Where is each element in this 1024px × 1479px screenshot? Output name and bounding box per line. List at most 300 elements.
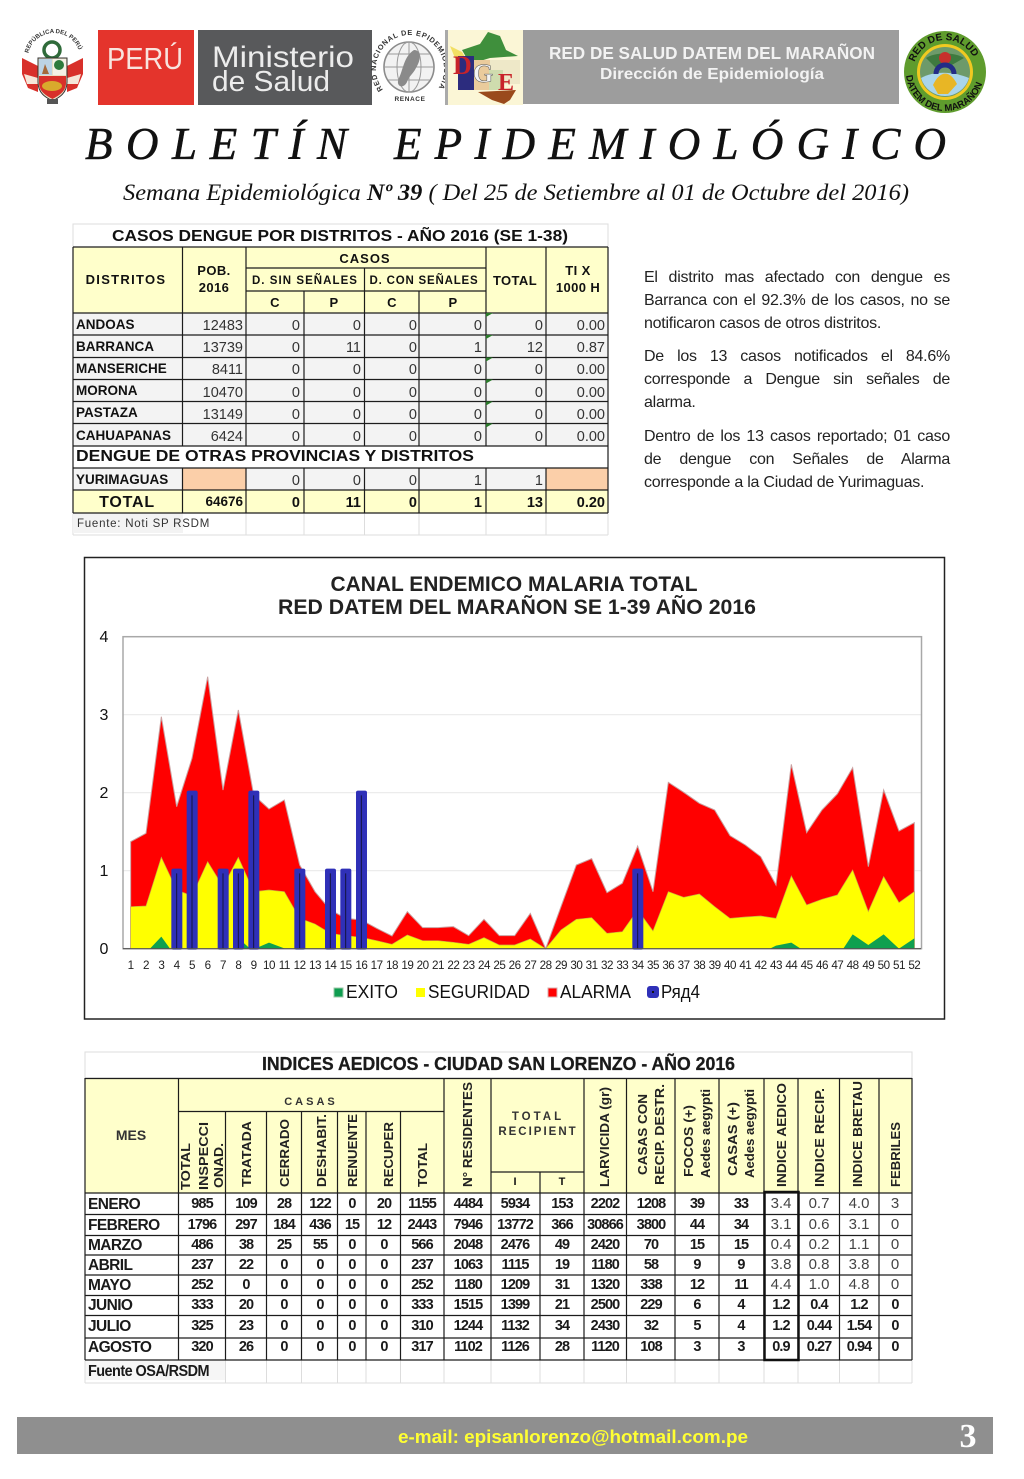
- table source note: Fuente OSA/RSDM: [88, 1363, 209, 1380]
- x axis week labels: 50: [878, 959, 891, 972]
- x axis week labels: 51: [893, 959, 905, 972]
- row: Yurimaguas: YURIMAGUAS: [76, 472, 168, 487]
- row: Andoas: 0: [353, 318, 361, 334]
- x axis week labels: 11: [279, 959, 290, 972]
- row: Andoas: 12483: [203, 318, 243, 334]
- row: Julio: 310: [411, 1318, 434, 1334]
- row: Mayo: 4.8: [849, 1276, 869, 1293]
- row: Julio: 1244: [454, 1318, 483, 1334]
- row: Febrero: 3.1: [849, 1216, 869, 1233]
- x axis week labels: 15: [340, 959, 352, 972]
- table column headers: P: [448, 295, 458, 310]
- row: Marzo: 2048: [454, 1237, 483, 1253]
- row: Junio: 229: [640, 1297, 663, 1313]
- row: Junio: 2500: [591, 1297, 620, 1313]
- row: Julio: 32: [644, 1318, 659, 1334]
- row: Marzo: 566: [411, 1237, 434, 1253]
- x axis week labels: 23: [463, 959, 475, 972]
- row: Abril: 1063: [454, 1257, 483, 1273]
- row: Morona: 0.00: [577, 385, 605, 401]
- row: Enero: 3.4: [771, 1195, 791, 1212]
- row: Julio: 1.54: [847, 1318, 872, 1334]
- panel: dengue cases table: [73, 224, 608, 535]
- icon: coat of arms of Peru: REPÚBLICA DEL PERÚ: [24, 28, 84, 53]
- x axis week labels: 40: [724, 959, 737, 972]
- row: Abril: 0: [280, 1257, 288, 1273]
- logo: RENACE globe: RENACE: [394, 96, 426, 103]
- x axis week labels: 48: [847, 959, 859, 972]
- row: Julio: [88, 1318, 899, 1335]
- table column headers: MES: [116, 1127, 146, 1143]
- table column headers: TOTAL: [178, 1143, 193, 1190]
- x axis week labels: 3: [158, 959, 164, 972]
- row: Febrero: 12: [377, 1217, 392, 1233]
- row: Marzo: 25: [277, 1237, 292, 1253]
- row: Abril: 9: [737, 1257, 745, 1273]
- area: SEGURIDAD: [131, 857, 914, 949]
- row: Julio: 0: [891, 1318, 899, 1334]
- footer bar: [17, 1417, 993, 1455]
- x axis week labels: 36: [662, 959, 674, 972]
- table column headers: RECIP. DESTR.: [652, 1084, 667, 1185]
- x axis week labels: 1: [128, 959, 134, 972]
- chart legend: EXITO: [346, 982, 398, 1002]
- row: Andoas: 0.00: [577, 318, 605, 334]
- x axis week labels: 14: [324, 959, 337, 972]
- row: Pastaza: 0: [353, 407, 361, 423]
- row: Barranca: 0.87: [577, 340, 605, 356]
- row: Febrero: 297: [235, 1217, 258, 1233]
- logo: Ministerio de Salud: [198, 30, 372, 105]
- table column headers: DISTRITOS: [86, 272, 166, 287]
- x axis week labels: 25: [493, 959, 505, 972]
- row: Pastaza: 0: [292, 407, 300, 423]
- row: Cahuapanas: CAHUAPANAS: [76, 428, 171, 443]
- x axis week labels: 9: [251, 959, 257, 972]
- x axis week labels: 19: [401, 959, 413, 972]
- row: Agosto: 3: [737, 1339, 745, 1355]
- x axis week labels: 13: [309, 959, 321, 972]
- table column headers: D. SIN SEÑALES: [252, 274, 358, 287]
- row: Total: 64676: [205, 494, 243, 509]
- row: Abril: 19: [555, 1257, 570, 1273]
- row: Andoas: [76, 317, 605, 334]
- row: Junio: 0: [316, 1297, 324, 1313]
- x axis week labels: 43: [770, 959, 782, 972]
- x axis week labels: 17: [371, 959, 383, 972]
- x axis week labels: 26: [509, 959, 521, 972]
- row: Febrero: 13772: [497, 1217, 534, 1233]
- text block: dengue analysis paragraph 1: notificaron casos de otros distritos.: [644, 315, 881, 332]
- row: Junio: 0.4: [810, 1297, 829, 1313]
- row: Enero: ENERO: [88, 1196, 141, 1213]
- row: Mayo: 0: [280, 1277, 288, 1293]
- row: Junio: 0: [280, 1297, 288, 1313]
- x axis week labels: 28: [540, 959, 552, 972]
- area: EXITO: [150, 934, 914, 949]
- table column headers: ONAD.: [211, 1143, 226, 1188]
- row: Barranca: 0: [409, 340, 417, 356]
- row: Enero: 0: [348, 1196, 356, 1212]
- row: Manseriche: 0: [535, 362, 543, 378]
- x axis week labels: [128, 959, 920, 972]
- table column headers: [116, 1081, 903, 1190]
- x axis week labels: 42: [755, 959, 767, 972]
- row: Andoas: 0: [409, 318, 417, 334]
- x axis week labels: 20: [417, 959, 430, 972]
- chart legend: [334, 982, 700, 1002]
- row: Agosto: 317: [411, 1339, 434, 1355]
- y axis labels: 4: [100, 629, 109, 646]
- row: Cahuapanas: 0: [535, 429, 543, 445]
- text block: dengue analysis paragraph 3: Dentro de los 13 casos reportado; 01 caso: [644, 428, 950, 445]
- row: Cahuapanas: 0.00: [577, 429, 605, 445]
- row: Morona: 0: [409, 385, 417, 401]
- row: Mayo: MAYO: [88, 1277, 131, 1294]
- x axis week labels: 35: [647, 959, 659, 972]
- x axis week labels: 12: [294, 959, 306, 972]
- row: Enero: 0.7: [809, 1195, 829, 1212]
- x axis week labels: 47: [831, 959, 843, 972]
- row: Mayo: 252: [191, 1277, 214, 1293]
- row: Marzo: 1.1: [849, 1236, 869, 1253]
- row: Cahuapanas: 0: [409, 429, 417, 445]
- table column headers: TOTAL: [493, 273, 537, 288]
- row: Yurimaguas: 1: [474, 473, 482, 489]
- row: Total: 0: [409, 495, 417, 511]
- row: Junio: 1.2: [850, 1297, 869, 1313]
- row: Junio: 1515: [454, 1297, 483, 1313]
- row: Mayo: 12: [690, 1277, 705, 1293]
- table fills and grid: [73, 224, 608, 535]
- row: Agosto: 0: [380, 1339, 388, 1355]
- row: Enero: 122: [309, 1196, 332, 1212]
- logo: DGE map: E: [498, 70, 514, 96]
- row: Abril: 1115: [501, 1257, 529, 1273]
- row: Junio: 0: [380, 1297, 388, 1313]
- row: Agosto: 1120: [591, 1339, 620, 1355]
- x axis week labels: 27: [524, 959, 536, 972]
- row: Agosto: 0.9: [772, 1339, 791, 1355]
- table column headers: C: [387, 295, 397, 310]
- row: Marzo: 49: [555, 1237, 570, 1253]
- row: Enero: 153: [551, 1196, 574, 1212]
- row: Abril: 0: [316, 1257, 324, 1273]
- chart legend: ALARMA: [560, 982, 631, 1002]
- x axis week labels: 22: [447, 959, 459, 972]
- x axis week labels: 5: [189, 959, 195, 972]
- row: Julio: 0: [280, 1318, 288, 1334]
- row: Manseriche: 0: [292, 362, 300, 378]
- text block: dengue analysis paragraph 2: [644, 348, 950, 411]
- logo: Red de Salud Datem round seal: DATEM DEL MARAÑON: [906, 75, 982, 112]
- row: Andoas: 0: [292, 318, 300, 334]
- page number: 3: [960, 1418, 976, 1455]
- row: Marzo: 55: [313, 1237, 328, 1253]
- row: Mayo: 1320: [591, 1277, 620, 1293]
- table column headers: [86, 251, 600, 310]
- table column headers: CERRADO: [277, 1119, 292, 1187]
- row: Febrero: 366: [551, 1217, 574, 1233]
- table column headers: FEBRILES: [888, 1122, 903, 1187]
- y axis labels: 1: [100, 863, 109, 880]
- row: Cahuapanas: [76, 428, 605, 445]
- row: Marzo: 0.4: [771, 1236, 791, 1253]
- table column headers: TOTAL: [512, 1111, 564, 1123]
- title: B O L E T Í N: [85, 119, 350, 169]
- row: Febrero: 184: [273, 1217, 296, 1233]
- row: Abril: 0: [380, 1257, 388, 1273]
- table column headers: LARVICIDA (gr): [597, 1087, 612, 1187]
- row: Febrero: 34: [734, 1217, 749, 1233]
- table column headers: T: [559, 1176, 566, 1188]
- text block: dengue analysis paragraph 1: [644, 269, 950, 332]
- text block: dengue analysis paragraph 1: Barranca con el 92.3% de los casos, no se: [644, 292, 950, 309]
- x axis week labels: 39: [709, 959, 721, 972]
- table column headers: D. CON SEÑALES: [370, 274, 478, 287]
- table column headers: TI X: [565, 263, 591, 278]
- table column headers: CASOS: [339, 251, 391, 266]
- table column headers: INSPECCI: [196, 1122, 211, 1190]
- row: Barranca: 11: [346, 340, 361, 356]
- x axis week labels: 41: [739, 959, 751, 972]
- x axis week labels: 52: [908, 959, 920, 972]
- row: Total: TOTAL: [99, 494, 155, 511]
- chart legend: SEGURIDAD: [428, 982, 530, 1002]
- row: Agosto: 0.27: [807, 1339, 832, 1355]
- row: Abril: 237: [411, 1257, 434, 1273]
- table column headers: INDICE AEDICO: [774, 1083, 789, 1187]
- logo: DGE map: [445, 30, 523, 105]
- row: Enero: 4484: [454, 1196, 483, 1212]
- row: Enero: 1155: [408, 1196, 437, 1212]
- row: Morona: 10470: [203, 385, 243, 401]
- row: Marzo: 38: [239, 1237, 254, 1253]
- row: Agosto: 1126: [501, 1339, 530, 1355]
- area: ALARMA: [131, 677, 914, 949]
- row: Junio: 1.2: [772, 1297, 791, 1313]
- row: Mayo: 4.4: [771, 1276, 791, 1293]
- chart title: CANAL ENDEMICO MALARIA TOTAL: [330, 573, 698, 596]
- row: Febrero: [88, 1216, 899, 1234]
- row: Andoas: 0: [474, 318, 482, 334]
- row: Yurimaguas: 0: [292, 473, 300, 489]
- row: Mayo: 11: [734, 1277, 749, 1293]
- x axis week labels: 2: [143, 959, 149, 972]
- x axis week labels: 30: [570, 959, 583, 972]
- x axis week labels: 29: [555, 959, 567, 972]
- icon: coat of arms of Peru: [22, 28, 84, 104]
- row: Morona: 0: [474, 385, 482, 401]
- x axis week labels: 37: [678, 959, 690, 972]
- row: Enero: 985: [191, 1196, 214, 1212]
- row: Agosto: 320: [191, 1339, 214, 1355]
- text block: dengue analysis paragraph 3: corresponde a la Ciudad de Yurimaguas.: [644, 474, 924, 491]
- row: Pastaza: 0: [474, 407, 482, 423]
- row: Enero: 20: [377, 1196, 392, 1212]
- row: Yurimaguas: 1: [535, 473, 543, 489]
- row: Abril: 1180: [591, 1257, 620, 1273]
- row: Enero: 3: [891, 1195, 899, 1212]
- row: Enero: 109: [235, 1196, 258, 1212]
- x axis week labels: 46: [816, 959, 828, 972]
- footer email: e-mail: episanlorenzo@hotmail.com.pe: [398, 1427, 748, 1447]
- row: Febrero: 436: [309, 1217, 332, 1233]
- row: Febrero: 3.1: [771, 1216, 791, 1233]
- table fills and grid: [85, 1052, 912, 1383]
- row: Morona: 0: [292, 385, 300, 401]
- text block: dengue analysis paragraph 2: alarma.: [644, 394, 696, 411]
- row: Abril: 3.8: [849, 1256, 869, 1273]
- row: Junio: 333: [411, 1297, 434, 1313]
- table column headers: FOCOS (+): [681, 1105, 696, 1177]
- row: Enero: 2202: [591, 1196, 620, 1212]
- y axis labels: [100, 629, 109, 958]
- row: Julio: 23: [239, 1318, 254, 1334]
- subtitle: Semana Epidemiológica Nº 39 ( Del 25 de Setiembre al 01 de Octubre del 2016): [123, 180, 909, 205]
- row: Junio: 6: [693, 1297, 701, 1313]
- row: Abril: 237: [191, 1257, 214, 1273]
- row: Enero: 39: [690, 1196, 705, 1212]
- row: Morona: MORONA: [76, 383, 138, 398]
- row: Mayo: 252: [411, 1277, 434, 1293]
- row: Mayo: 0: [348, 1277, 356, 1293]
- table column headers: TOTAL: [415, 1143, 430, 1187]
- row: Abril: 0.8: [809, 1256, 829, 1273]
- row: Barranca: 1: [474, 340, 482, 356]
- row: Total: 0: [292, 495, 300, 511]
- row: Marzo: 0: [348, 1237, 356, 1253]
- logo: Red de Salud Datem round seal: [904, 31, 986, 113]
- table column headers: POB.: [197, 263, 231, 278]
- row: Marzo: 2476: [501, 1237, 530, 1253]
- row: Morona: [76, 383, 605, 401]
- row: Mayo: 0: [380, 1277, 388, 1293]
- row: Mayo: 0: [242, 1277, 250, 1293]
- text block: dengue analysis paragraph 2: De los 13 casos notificados el 84.6%: [644, 348, 950, 365]
- row: Pastaza: 0: [409, 407, 417, 423]
- row: Abril: 22: [239, 1257, 254, 1273]
- text block: dengue analysis paragraph 3: [644, 428, 950, 491]
- row: Julio: 0: [380, 1318, 388, 1334]
- row: Agosto: 0: [316, 1339, 324, 1355]
- row: Total: 13: [527, 495, 543, 511]
- x axis week labels: 45: [801, 959, 813, 972]
- row: Abril: [88, 1256, 899, 1274]
- row: Julio: 325: [191, 1318, 214, 1334]
- row: Pastaza: 13149: [203, 407, 243, 423]
- row: Enero: 28: [277, 1196, 292, 1212]
- title: E P I D E M I O L Ó G I C O: [393, 119, 946, 169]
- panel: aedic indices table: [85, 1052, 912, 1383]
- row: Febrero: 0.6: [809, 1216, 829, 1233]
- row: Agosto: 28: [555, 1339, 570, 1355]
- logo: Red de Salud Datem round seal: RED DE SALUD: [908, 33, 978, 62]
- row: Yurimaguas: 0: [353, 473, 361, 489]
- row: Junio: 4: [737, 1297, 745, 1313]
- text block: dengue analysis paragraph 3: de dengue con Señales de Alarma: [644, 451, 950, 468]
- text block: dengue analysis paragraph 1: El distrito mas afectado con dengue es: [644, 269, 950, 286]
- row: Febrero: 3800: [637, 1217, 666, 1233]
- row: Manseriche: 0: [409, 362, 417, 378]
- row: Total: 11: [346, 495, 361, 511]
- row: Barranca: 13739: [203, 340, 243, 356]
- x axis week labels: 7: [220, 959, 226, 972]
- bars: Ряд4: [171, 791, 643, 950]
- x axis week labels: 24: [478, 959, 491, 972]
- row: Agosto: 1102: [454, 1339, 483, 1355]
- table column headers: RECUPER: [381, 1121, 396, 1187]
- x axis week labels: 4: [174, 959, 181, 972]
- row: Enero: 33: [734, 1196, 749, 1212]
- row: Abril: 0: [348, 1257, 356, 1273]
- header logos band: [22, 28, 986, 113]
- x axis week labels: 38: [693, 959, 705, 972]
- row: Barranca: 12: [527, 340, 543, 356]
- row: Enero: 5934: [501, 1196, 530, 1212]
- row: Marzo: 0.2: [809, 1236, 829, 1253]
- row: Total: 0.20: [577, 495, 605, 511]
- chart title: RED DATEM DEL MARAÑON SE 1-39 AÑO 2016: [278, 596, 756, 619]
- banner: Red de Salud Datem del Marañón: [523, 30, 899, 104]
- stacked area and bar plot: [128, 677, 920, 972]
- table column headers: Aedes aegypti: [742, 1089, 757, 1178]
- table heading: INDICES AEDICOS - CIUDAD SAN LORENZO - AÑO 2016: [262, 1053, 735, 1074]
- row: Marzo: 486: [191, 1237, 214, 1253]
- row: Julio: 0.44: [807, 1318, 832, 1334]
- row: Mayo: 1209: [501, 1277, 530, 1293]
- row: Febrero: 1796: [188, 1217, 217, 1233]
- table column headers: INDICE RECIP.: [812, 1088, 827, 1187]
- row: Marzo: 70: [644, 1237, 659, 1253]
- x axis week labels: 32: [601, 959, 613, 972]
- x axis week labels: 8: [235, 959, 241, 972]
- x axis week labels: 6: [205, 959, 211, 972]
- row: Marzo: 15: [734, 1237, 749, 1253]
- row: Junio: 1399: [501, 1297, 530, 1313]
- row: Cahuapanas: 0: [353, 429, 361, 445]
- row: Mayo: 1.0: [809, 1276, 829, 1293]
- row: Julio: 0: [316, 1318, 324, 1334]
- row: Marzo: [88, 1236, 899, 1254]
- row: Agosto: 26: [239, 1339, 254, 1355]
- y axis labels: 3: [100, 707, 109, 724]
- row: Marzo: MARZO: [88, 1237, 142, 1254]
- x axis week labels: 21: [432, 959, 444, 972]
- table column headers: CASAS: [284, 1096, 338, 1108]
- row: Mayo: 1180: [454, 1277, 483, 1293]
- logo: Ministerio de Salud: de Salud: [212, 66, 330, 98]
- row: Abril: 0: [891, 1256, 899, 1273]
- table column headers: CASAS (+): [725, 1102, 740, 1176]
- chart title: [278, 573, 756, 619]
- row: Marzo: 15: [690, 1237, 705, 1253]
- row: Total: 1: [474, 495, 482, 511]
- row: Manseriche: 0: [353, 362, 361, 378]
- row: Yurimaguas: [76, 472, 543, 489]
- table column headers: N° RESIDENTES: [460, 1082, 475, 1187]
- banner: Red de Salud Datem del Marañón: Dirección de Epidemiología: [600, 66, 824, 83]
- logo: Perú red block: PERÚ: [107, 41, 183, 76]
- table column headers: C: [270, 295, 280, 310]
- row: Julio: 2430: [591, 1318, 620, 1334]
- row: Pastaza: [76, 405, 605, 423]
- table column headers: I: [513, 1176, 517, 1188]
- row: Agosto: 108: [640, 1339, 663, 1355]
- row: Febrero: 30866: [587, 1217, 624, 1233]
- chart legend: Ряд4: [661, 982, 700, 1002]
- row: Junio: 0: [891, 1297, 899, 1313]
